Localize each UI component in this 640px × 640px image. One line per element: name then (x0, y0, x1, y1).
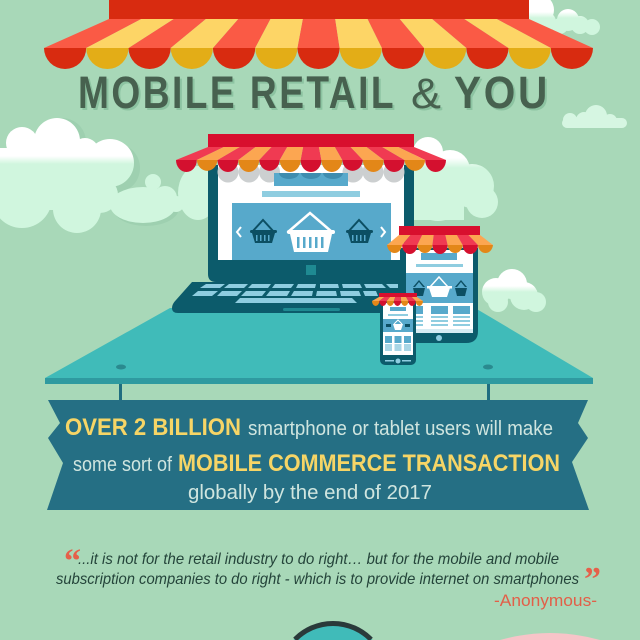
laptop lid (208, 165, 414, 282)
banner line 1 (65, 414, 553, 441)
web page title bar (262, 191, 360, 197)
table (45, 308, 593, 401)
cloud: mid right (562, 105, 627, 128)
arrows (237, 227, 385, 237)
banner line 2: some sort of (73, 454, 172, 476)
opening quote mark: “ (64, 543, 81, 580)
closing quote mark: ” (584, 561, 601, 598)
banner line 3: globally by the end of 2017 (188, 482, 432, 504)
table top (45, 308, 593, 378)
tablet product cards (406, 305, 473, 333)
awning stripes (44, 19, 593, 48)
banner shape (47, 400, 589, 510)
main awning (44, 0, 593, 69)
awning scallops (44, 48, 593, 69)
quote (56, 543, 601, 610)
laptop screen (218, 165, 404, 260)
device: laptop (172, 134, 446, 313)
icon: pink circle (cropped) (500, 633, 600, 640)
table legs (119, 384, 490, 401)
table bolts (116, 364, 493, 370)
title: & (411, 70, 441, 118)
phone home button (385, 358, 411, 364)
laptop base (172, 282, 400, 313)
icon: tablet basket (427, 277, 452, 297)
tablet page header (421, 253, 457, 260)
banner line 1: smartphone or tablet users will make (248, 418, 553, 440)
banner (47, 400, 589, 510)
table front edge (45, 378, 593, 384)
tablet title bar (416, 264, 463, 267)
tablet screen (406, 250, 473, 333)
banner line 2: MOBILE COMMERCE TRANSACTION (178, 450, 560, 477)
tablet body (400, 248, 478, 343)
icon: small basket right (346, 220, 373, 243)
quote attribution: -Anonymous- (494, 592, 597, 610)
cloud: right of laptop (409, 137, 498, 221)
phone awning (372, 293, 423, 306)
icon: teal circle outline (295, 623, 371, 640)
laptop awning (176, 134, 446, 172)
icon: small basket left (250, 220, 277, 243)
tablet product panel (406, 273, 473, 303)
phone title bar (388, 314, 408, 316)
cloud: behind tablet (482, 269, 546, 312)
gray awning shadow (218, 162, 404, 182)
tablet home button (436, 335, 442, 341)
phone header (390, 307, 406, 311)
device: phone (372, 293, 423, 365)
phone body (380, 297, 416, 365)
icon: tablet side baskets (413, 280, 467, 296)
cloud: large left (0, 118, 218, 233)
title: YOU (454, 67, 550, 118)
tablet awning (387, 226, 493, 254)
laptop keys (192, 284, 398, 303)
icon: teal circle (cropped) (294, 623, 372, 640)
product carousel (232, 203, 391, 260)
laptop home button (306, 265, 316, 275)
banner line 1: OVER 2 BILLION (65, 414, 241, 441)
device: tablet (387, 226, 493, 343)
quote text: ...it is not for the retail industry to do right… but for the mobile and mobile (78, 551, 559, 568)
phone screen (383, 303, 413, 355)
icon: big white basket (287, 213, 335, 252)
quote text (56, 551, 579, 588)
phone product cards (385, 336, 411, 351)
laptop trackpad slot (283, 308, 340, 311)
phone product panel (383, 319, 413, 332)
web page header (274, 173, 348, 186)
awning top band (109, 0, 529, 19)
cloud: top right (522, 0, 600, 35)
title: MOBILE RETAIL (78, 67, 396, 118)
quote text: subscription companies to do right - which is to provide internet on smartphones (56, 571, 579, 588)
